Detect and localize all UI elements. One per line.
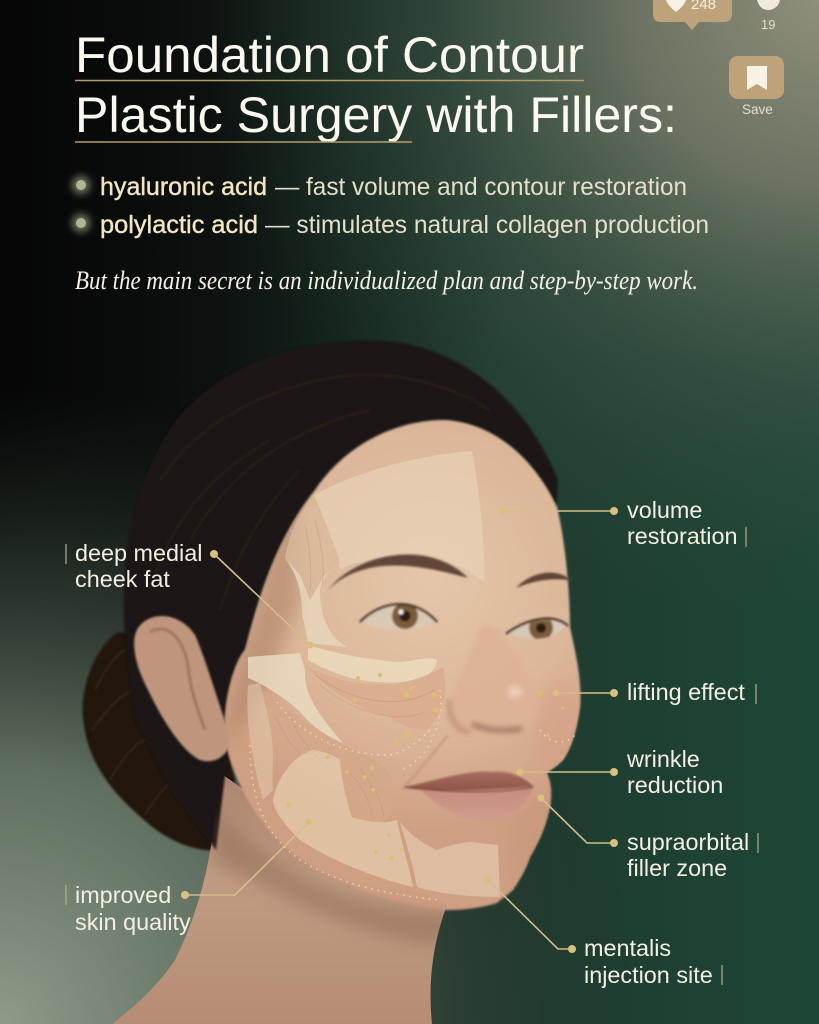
right eye xyxy=(506,616,568,640)
under-eye band xyxy=(308,645,437,683)
jaw strip xyxy=(247,683,273,800)
right brow xyxy=(516,573,573,588)
social: comments xyxy=(757,0,780,32)
label: supraorbital filler zone: filler zone xyxy=(627,855,727,881)
temple muscle xyxy=(285,500,340,590)
portrait illustration xyxy=(83,341,584,1024)
label: improved skin quality: skin quality xyxy=(75,909,191,935)
face xyxy=(225,420,580,910)
bullet list xyxy=(72,173,709,239)
filler dots xyxy=(286,673,564,860)
label: mentalis injection site: mentalis xyxy=(584,935,671,961)
bullet: hyaluronic acid: hyaluronic acid xyxy=(100,173,267,201)
label: mentalis injection site xyxy=(484,876,722,988)
label: wrinkle reduction xyxy=(516,746,723,798)
label: improved skin quality: improved xyxy=(75,882,171,908)
smile fold xyxy=(402,735,448,790)
neck xyxy=(112,770,447,1024)
chin shadow xyxy=(212,816,446,946)
label: volume restoration: restoration xyxy=(627,523,738,549)
cheek muscle xyxy=(307,667,445,730)
label: deep medial cheek fat xyxy=(66,540,314,648)
face shading xyxy=(228,490,584,900)
label: volume restoration xyxy=(500,497,746,549)
social: likes xyxy=(653,0,732,30)
bullet: hyaluronic acid xyxy=(72,173,687,201)
contour dots xyxy=(250,690,575,900)
bullet: polylactic acid: — stimulates natural collagen production xyxy=(265,211,709,239)
lower cheek fibers xyxy=(262,690,394,823)
label: wrinkle reduction: reduction xyxy=(627,772,723,798)
bullet: polylactic acid: polylactic acid xyxy=(100,211,258,239)
social: comments: 19 xyxy=(761,17,775,32)
hair bun xyxy=(83,632,235,850)
forehead panel xyxy=(314,451,484,582)
lateral cheek fan xyxy=(248,653,343,743)
label: supraorbital filler zone: supraorbital xyxy=(627,829,749,855)
label: volume restoration: volume xyxy=(627,497,702,523)
bullet: hyaluronic acid: — fast volume and contour restoration xyxy=(275,173,687,201)
label: lifting effect xyxy=(553,679,756,705)
label: improved skin quality xyxy=(66,818,312,935)
lips xyxy=(405,772,533,821)
label: deep medial cheek fat: deep medial xyxy=(75,540,202,566)
label: supraorbital filler zone xyxy=(538,794,758,881)
label: deep medial cheek fat: cheek fat xyxy=(75,566,170,592)
social: save: Save xyxy=(742,102,773,117)
social: save xyxy=(729,56,784,117)
hair xyxy=(124,341,558,850)
label: lifting effect: lifting effect xyxy=(627,679,745,705)
jaw panel xyxy=(273,750,413,887)
title: Foundation of Contour xyxy=(75,27,584,83)
ear xyxy=(134,616,230,761)
italic note: But the main secret is an individualized plan and step-by-step work. xyxy=(75,266,698,295)
nose xyxy=(450,625,538,733)
fibre lines xyxy=(275,520,435,818)
label: mentalis injection site: injection site xyxy=(584,962,713,988)
chin panel xyxy=(400,822,500,897)
eye arc xyxy=(285,558,347,647)
left eye xyxy=(360,603,437,631)
title xyxy=(75,27,677,143)
left brow xyxy=(328,554,468,590)
label: wrinkle reduction: wrinkle xyxy=(626,746,700,772)
title: Plastic Surgery with Fillers: xyxy=(75,87,677,143)
bullet: polylactic acid xyxy=(72,211,709,239)
